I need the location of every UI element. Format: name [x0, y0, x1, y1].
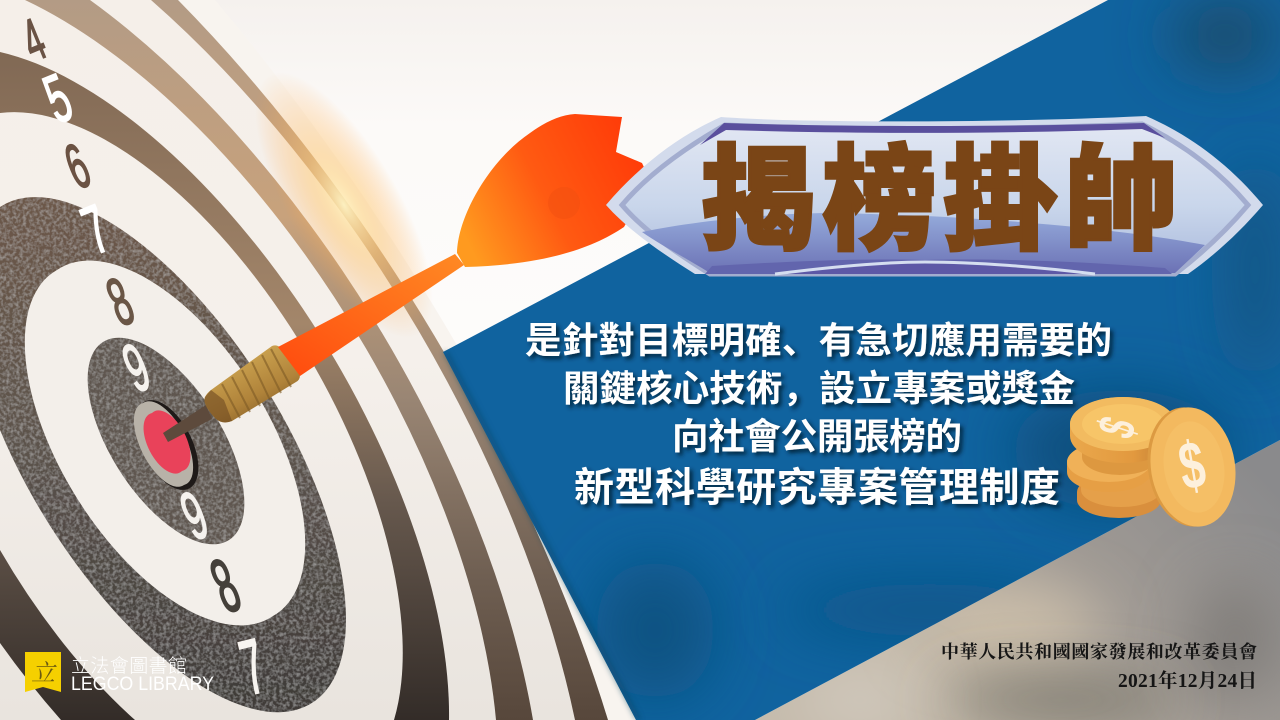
- bullseye red hole: [144, 410, 190, 474]
- white ring 4: [0, 0, 496, 720]
- ring numbers: 7: [232, 622, 273, 711]
- coin upright: $: [1173, 427, 1211, 505]
- grey cloud corner: [755, 440, 1280, 720]
- banner inner panel: [622, 124, 1248, 274]
- white ring: [0, 0, 575, 720]
- banner outer frame: [606, 116, 1263, 274]
- bullseye shadow: [136, 400, 198, 490]
- dark ring 5: [0, 52, 449, 720]
- description text: 向社會公開張榜的: [672, 416, 962, 457]
- title banner: [606, 116, 1263, 274]
- description text: 關鍵核心技術，設立專案或獎金: [563, 368, 1075, 409]
- outer dark ring 3: [0, 0, 533, 720]
- coin upright: [1139, 401, 1244, 533]
- logo chinese name: 立法會圖書館: [71, 655, 187, 677]
- description text: 是針對目標明確、有急切應用需要的: [525, 320, 1112, 361]
- target paper rim: [0, 0, 636, 720]
- dart barrel: [204, 345, 300, 422]
- logo: LegCo Library: [25, 652, 214, 695]
- source text: [941, 641, 1257, 692]
- banner top purple band: [700, 123, 1165, 145]
- dark ring 9: [88, 338, 244, 544]
- dark ring 7: [0, 197, 346, 712]
- description text: 新型科學研究專案管理制度: [574, 466, 1060, 510]
- logo mark: 立: [31, 660, 57, 687]
- ring numbers: 5: [34, 59, 82, 138]
- icon: gold coins: [1067, 397, 1244, 533]
- ring numbers: 8: [97, 264, 143, 341]
- blue edge shadow: [443, 352, 641, 720]
- banner bottom highlight: [775, 262, 1095, 274]
- title: 揭榜掛帥: [702, 138, 1178, 265]
- coin stack bottom: [1067, 397, 1176, 518]
- source text: 2021年12月24日: [1118, 669, 1257, 692]
- ring numbers: 6: [55, 130, 99, 203]
- ring numbers: 9: [113, 330, 160, 407]
- dart: [163, 114, 650, 442]
- dart shaft: [278, 254, 464, 376]
- ring numbers: 8: [200, 542, 251, 629]
- white ring 8: [25, 261, 305, 625]
- logo english name: LEGCO LIBRARY: [71, 674, 214, 695]
- banner bottom arch: [705, 259, 1172, 274]
- dartboard target: [0, 0, 636, 720]
- banner lower wave: [642, 213, 1205, 273]
- coin stack bottom: $: [1087, 411, 1148, 445]
- dart flight: [457, 114, 650, 267]
- sun glow: [221, 48, 467, 362]
- white ring 6: [0, 112, 403, 720]
- bullseye rim: [134, 401, 193, 487]
- flight highlight: [548, 187, 580, 219]
- ring numbers: 7: [72, 190, 120, 269]
- ring numbers: 9: [171, 478, 218, 555]
- source text: 中華人民共和國國家發展和改革委員會: [941, 641, 1257, 662]
- ring numbers: 4: [13, 7, 54, 75]
- ring numbers: [13, 7, 273, 711]
- dart needle: [163, 405, 212, 442]
- panel: blue diagonal background: [440, 0, 1280, 720]
- logo yellow ribbon: [25, 652, 61, 692]
- description text: [525, 320, 1112, 510]
- outermost dark ring: [0, 0, 608, 720]
